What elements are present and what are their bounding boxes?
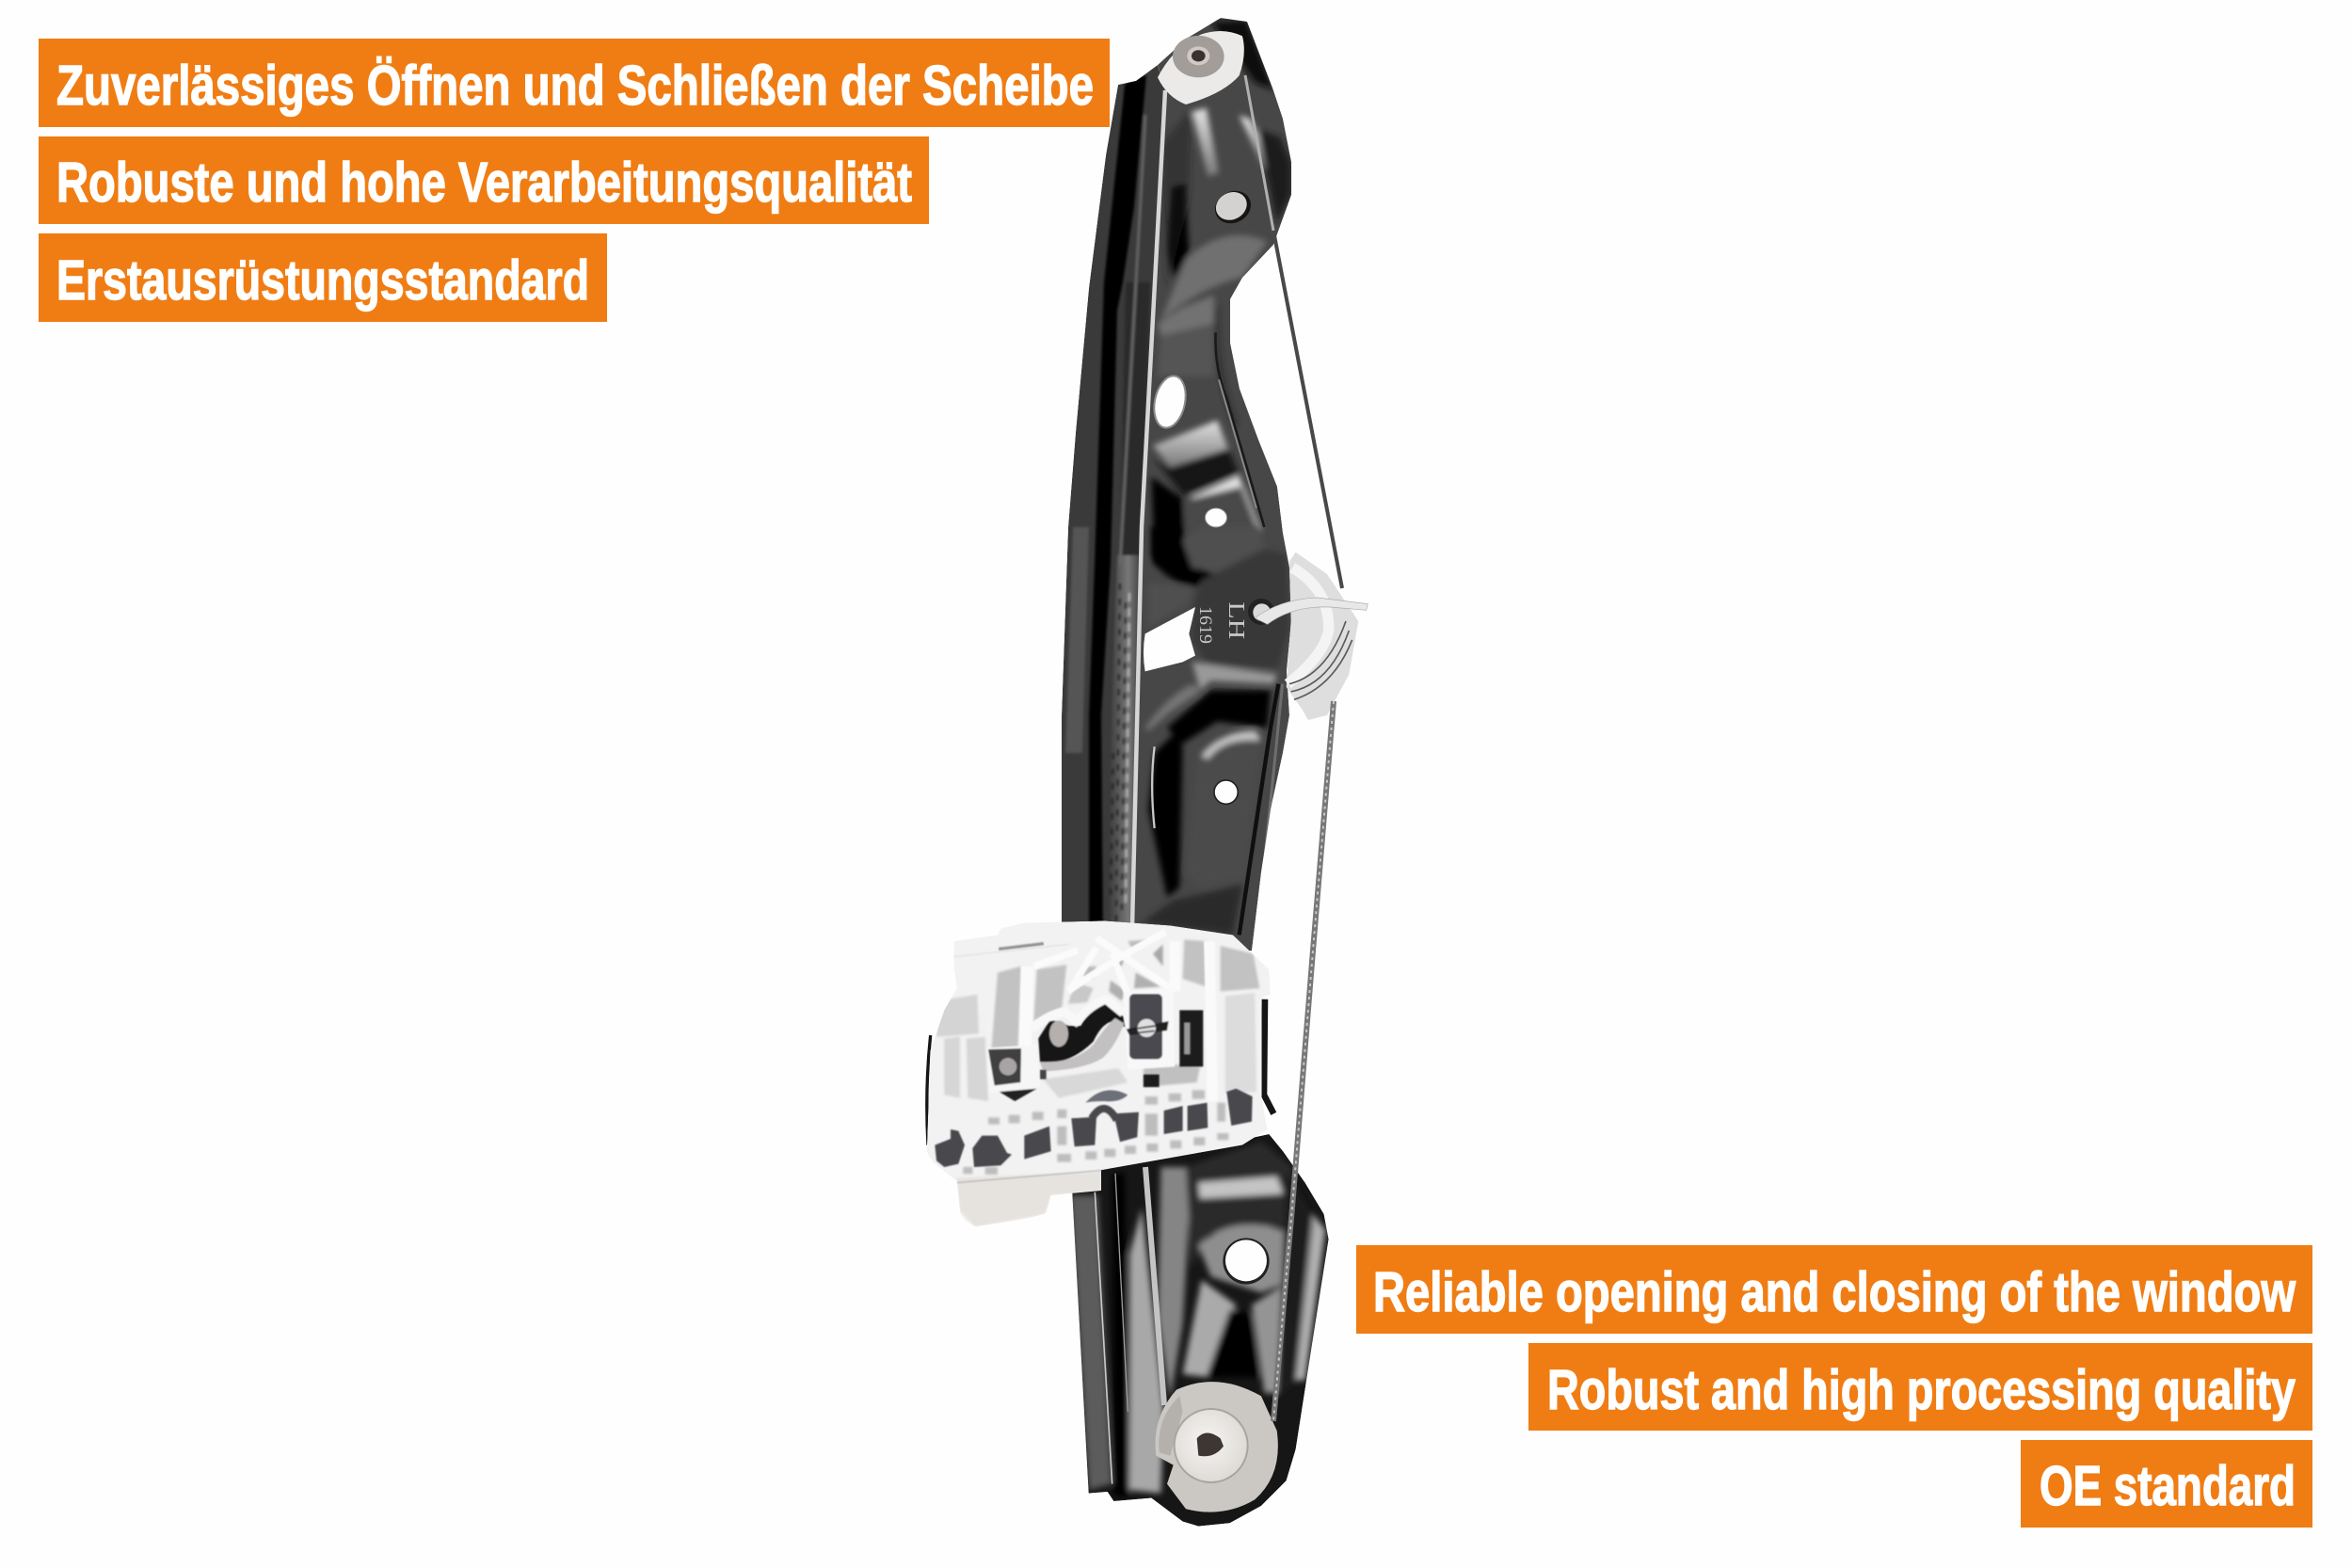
label: OE standard (EN) [2021, 1440, 2312, 1528]
mid bracket crisp lines [1215, 332, 1264, 527]
arch clip [1085, 1090, 1128, 1103]
lattice struts [1033, 932, 1175, 995]
label: build quality (EN) [1528, 1343, 2312, 1431]
sliding carrier [927, 920, 1271, 1226]
dark window [1038, 1002, 1126, 1062]
label: build quality (DE) [39, 136, 929, 224]
panel: English benefits [1356, 1245, 2312, 1528]
right window [1179, 1010, 1203, 1066]
label: reliable opening (DE) [39, 39, 1110, 127]
metal bracket [1129, 18, 1291, 951]
upper bracket shading [1160, 20, 1291, 425]
bracket holes and rivet [1144, 186, 1274, 804]
foot hole and pulley [1156, 1238, 1278, 1512]
mounting rivet [1212, 186, 1254, 228]
large hole [1223, 1238, 1270, 1285]
drum with zip tie [1255, 552, 1368, 720]
carrier sharp details [935, 932, 1253, 1183]
stud hole [1248, 599, 1274, 625]
product: window regulator [927, 18, 1368, 1527]
lower bracket foot [1070, 1134, 1329, 1527]
carrier dark edges [927, 1000, 1273, 1145]
label: reliable opening (EN) [1356, 1245, 2312, 1334]
lower bracket crisp lines [1152, 684, 1283, 944]
label: reliable opening (DE): Zuverlässiges Öffnen und Schließen der Scheibe [56, 55, 1094, 117]
panel: German benefits [39, 39, 1110, 322]
label: OE standard (DE) [39, 233, 607, 322]
oval hole [1150, 373, 1190, 431]
part marking LH: LH [1224, 601, 1248, 639]
pad hole [1214, 780, 1238, 804]
top pulley [1158, 31, 1244, 104]
guide rail [1062, 65, 1165, 941]
small hole [1205, 508, 1227, 527]
right clip [1123, 988, 1175, 1070]
label: build quality (DE): Robuste und hohe Verarbeitungsqualität [56, 152, 912, 214]
bottom pulley [1156, 1382, 1278, 1512]
label: OE standard (DE): Erstausrüstungsstandard [56, 249, 589, 312]
left clip [986, 1045, 1040, 1094]
part marking 1619: 1619 [1195, 606, 1215, 644]
lower bracket shading [1142, 527, 1289, 935]
lower band cells [963, 1090, 1228, 1175]
cables [1132, 75, 1342, 1421]
mid bracket shading [1151, 295, 1263, 565]
cutout [1144, 607, 1195, 671]
dark clip row [935, 1089, 1253, 1167]
carrier soft recesses [936, 939, 1259, 1226]
